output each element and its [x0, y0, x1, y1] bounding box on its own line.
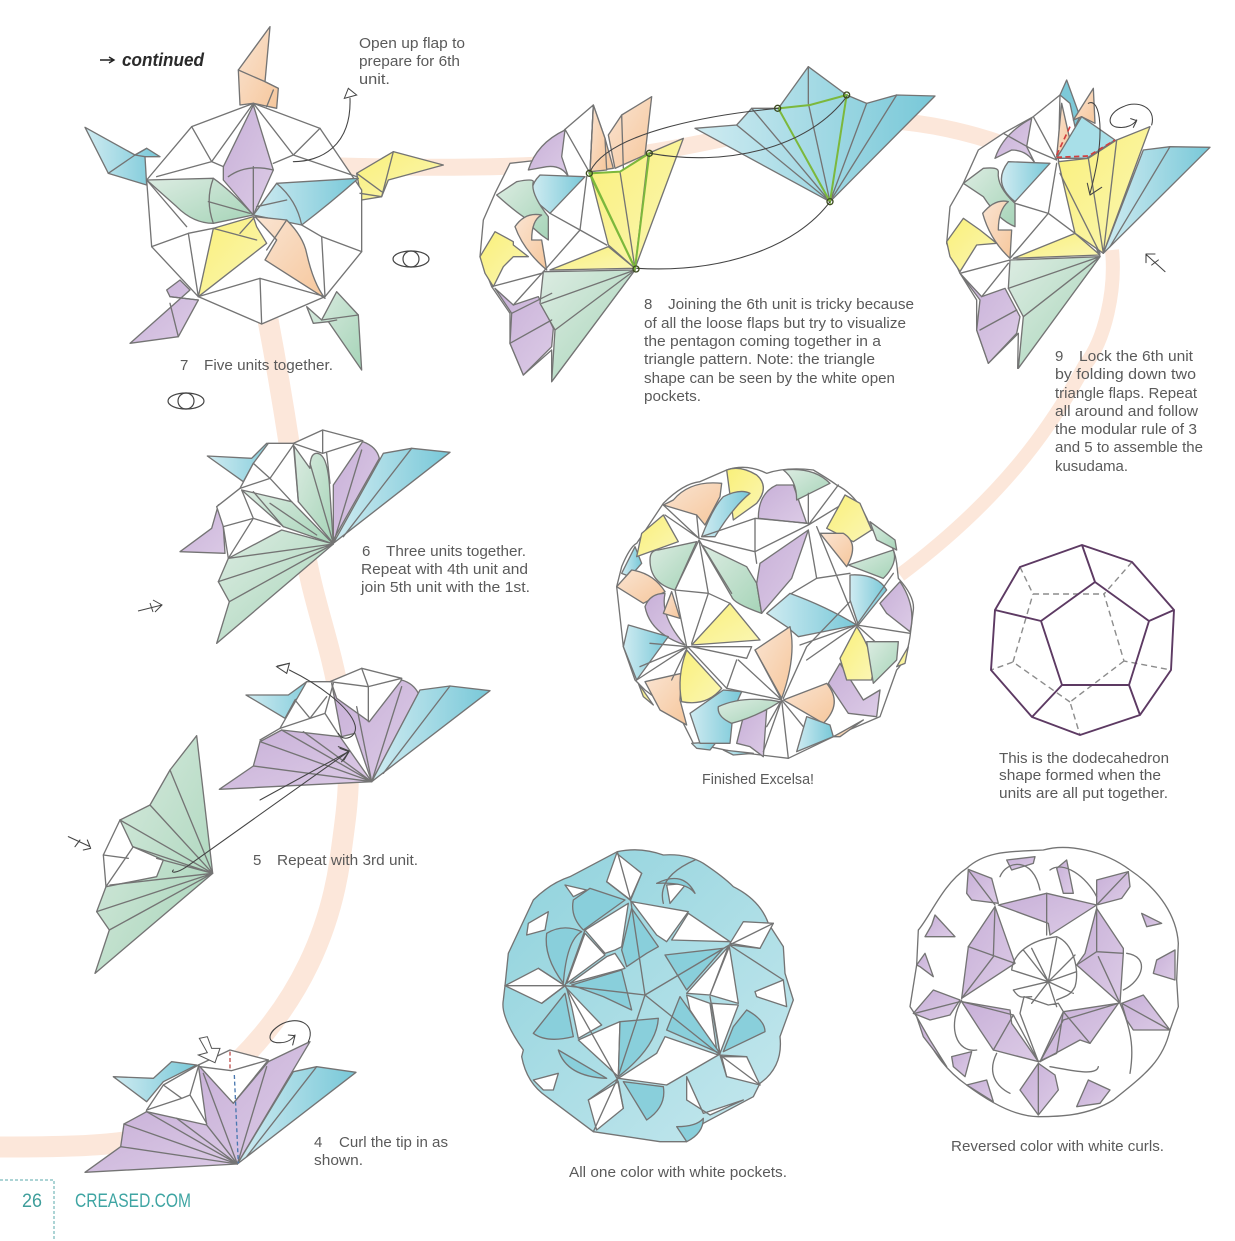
white partial ball: [480, 105, 635, 382]
caption 9: [1055, 348, 1203, 475]
green curl: [497, 180, 548, 240]
figure 4: [85, 1042, 356, 1172]
caption 4: Curl the tip in as: [339, 1134, 448, 1151]
purple lower: [961, 274, 1020, 363]
blue fan: [1103, 147, 1210, 253]
folded blue triangle: [1057, 117, 1115, 158]
figure 5 main: [219, 668, 490, 789]
caption 9: kusudama.: [1055, 458, 1128, 475]
open flap note: unit.: [359, 71, 390, 88]
flap: blue: [85, 127, 160, 185]
footer: page number and website: CREASED.COM: [75, 1191, 191, 1212]
caption: dodecahedron: This is the dodecahedron: [999, 750, 1169, 767]
flap: yellow: [357, 152, 443, 200]
caption: all one color: All one color with white pockets.: [569, 1164, 787, 1181]
figure 8: joining the sixth unit: [480, 67, 935, 382]
joining arcs: [590, 97, 847, 269]
icon: eye view symbol: [168, 393, 204, 409]
open flap note: Open up flap to: [359, 35, 465, 52]
pentagonal white body: [147, 103, 362, 324]
caption 6: 6: [362, 543, 370, 560]
white partial ball: [947, 95, 1100, 368]
caption 4: [314, 1134, 448, 1169]
caption 9: and 5 to assemble the: [1055, 439, 1203, 456]
continued heading: continued: [122, 50, 205, 70]
open flap note: prepare for 6th: [359, 53, 460, 70]
caption: dodecahedron: shape formed when the: [999, 767, 1161, 784]
teal kusudama with white pockets: [503, 850, 793, 1142]
third green unit: [95, 736, 213, 973]
figure 6: [180, 430, 450, 643]
figure 6 and figure 5: assembled units: [180, 430, 490, 800]
icon: rotate arrow: [138, 600, 162, 612]
caption 8: of all the loose flaps but try to visualize: [644, 315, 906, 332]
caption: dodecahedron: units are all put together.: [999, 785, 1168, 802]
flap: green: [307, 292, 362, 370]
caption 4: 4: [314, 1134, 322, 1151]
purple kusudama with white curls: [910, 847, 1178, 1117]
caption 7: Five units together.: [204, 357, 333, 374]
blue curl: [532, 175, 585, 213]
icon: eye view symbol: [393, 251, 429, 267]
green fan: [540, 270, 635, 382]
caption: dodecahedron: [999, 750, 1169, 802]
yellow fan: [1058, 127, 1150, 253]
back orange flaps: [590, 105, 613, 172]
finished multicolor kusudama: [617, 467, 913, 758]
caption 8: Joining the 6th unit is tricky because: [668, 296, 914, 313]
yellow small: [1013, 233, 1100, 258]
yellow small: [550, 247, 635, 270]
flap: orange: [238, 27, 278, 108]
figure 7: five units together: [85, 27, 443, 370]
caption 8: 8: [644, 296, 652, 313]
caption 9: by folding down two: [1055, 366, 1196, 383]
caption 6: join 5th unit with the 1st.: [360, 579, 530, 596]
footer: page number and website: [0, 1180, 191, 1241]
caption: finished: Finished Excelsa!: [702, 771, 814, 788]
curl and fold arrows: [1087, 103, 1165, 272]
caption 8: triangle pattern. Note: the triangle: [644, 351, 875, 368]
push-in arrow: [198, 1037, 220, 1063]
caption 8: [644, 296, 914, 405]
petal: yellow: [198, 217, 267, 297]
caption: reversed color: Reversed color with white curls.: [951, 1138, 1164, 1155]
caption 6: [360, 543, 530, 596]
purple curl: [995, 118, 1035, 163]
open flap arrow: [293, 98, 350, 162]
purple lower: [495, 288, 553, 375]
back flaps: [1060, 80, 1080, 127]
petal: purple: [223, 105, 273, 215]
detached blue unit: [695, 67, 935, 202]
yellow left: [480, 232, 528, 287]
orange curl: [983, 201, 1012, 258]
yellow left: [947, 218, 997, 272]
fold guides: [228, 1052, 232, 1068]
green fan: [1008, 257, 1100, 368]
caption 5: 5: [253, 852, 261, 869]
caption 4: shown.: [314, 1152, 363, 1169]
caption 6: Repeat with 4th unit and: [361, 561, 528, 578]
curl arrow: [270, 1021, 310, 1045]
petal: green: [147, 178, 253, 223]
orange curl: [515, 214, 547, 270]
red fold line: [1057, 127, 1115, 157]
caption 7: 7: [180, 357, 188, 374]
caption 9: Lock the 6th unit: [1079, 348, 1194, 365]
caption 9: triangle flaps. Repeat: [1055, 385, 1198, 402]
arrow pointing to next unit: [260, 663, 355, 800]
petal: orange: [255, 217, 325, 298]
open flap note: [359, 35, 465, 88]
peach connecting ribbon: [0, 120, 1113, 1147]
caption 8: the pentagon coming together in a: [644, 333, 882, 350]
caption 9: the modular rule of 3: [1055, 421, 1197, 438]
caption 6: Three units together.: [386, 543, 526, 560]
petal: blue: [253, 178, 358, 225]
dodecahedron diagram: [991, 545, 1174, 735]
flap: purple: [130, 280, 198, 343]
blue curl: [1001, 162, 1050, 202]
footer: page number and website: 26: [22, 1191, 42, 1212]
joining points: [586, 92, 850, 272]
caption 9: 9: [1055, 348, 1063, 365]
caption 5: Repeat with 3rd unit.: [277, 852, 418, 869]
caption 8: pockets.: [644, 388, 701, 405]
green pentagon guide: [589, 95, 847, 268]
caption 8: shape can be seen by the white open: [644, 370, 895, 387]
purple curl: [528, 130, 568, 177]
caption 9: all around and follow: [1055, 403, 1198, 420]
yellow fan: [590, 138, 683, 268]
arrow to figure 5: [68, 748, 349, 872]
green third unit and figure 4: [68, 736, 356, 1172]
figure 9: lock the sixth unit: [947, 80, 1210, 368]
green curl: [963, 168, 1015, 227]
